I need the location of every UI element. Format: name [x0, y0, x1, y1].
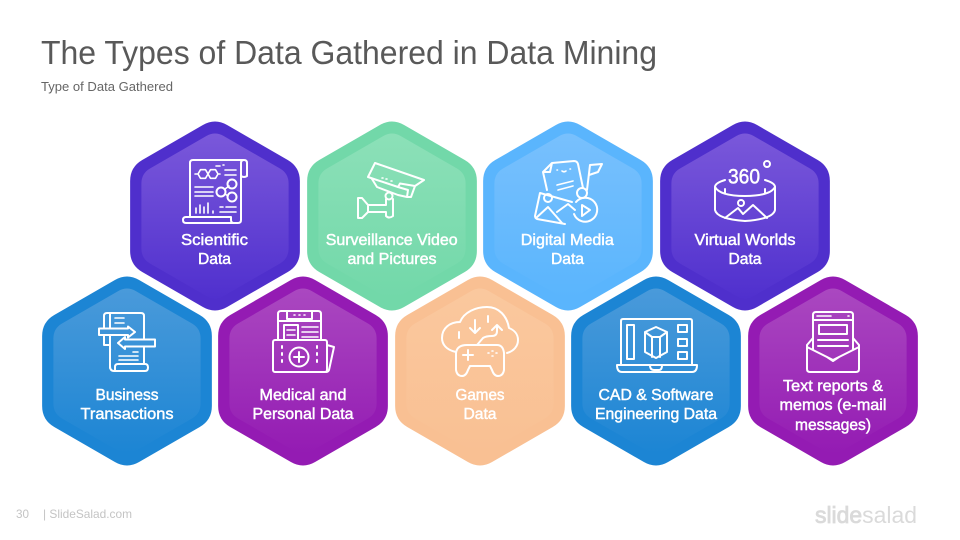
label	[780, 378, 886, 434]
panel: Medical and Personal Data	[218, 276, 388, 466]
label: Games	[456, 387, 504, 404]
page number: 30	[16, 507, 29, 521]
label: Digital Media	[521, 232, 614, 249]
icon: 360 virtual world: 360	[728, 166, 760, 188]
label: and Pictures	[348, 251, 436, 268]
footer source: | SlideSalad.com	[43, 507, 132, 521]
label: Transactions	[80, 406, 174, 423]
subtitle: Type of Data Gathered	[41, 80, 173, 94]
label: Data	[198, 251, 231, 268]
label	[694, 232, 796, 268]
panel: Games Data	[395, 276, 565, 466]
icon: 360 virtual world	[715, 161, 775, 221]
panel: Virtual Worlds Data	[660, 122, 830, 310]
label: memos (e-mail	[780, 397, 886, 414]
label: Business	[96, 387, 158, 404]
label: Data	[728, 251, 762, 268]
icon: medical folder	[273, 311, 334, 372]
label: Scientific	[181, 232, 248, 249]
icon: laptop with 3D model	[617, 319, 697, 372]
label	[326, 232, 458, 268]
label	[521, 232, 614, 268]
label: Medical and	[260, 387, 346, 404]
label: CAD & Software	[598, 387, 714, 404]
icon: email envelope	[807, 312, 859, 372]
label	[181, 232, 248, 268]
label	[456, 387, 504, 423]
icon: cloud gaming	[442, 307, 518, 376]
panel: Text reports & memos	[748, 276, 918, 466]
label	[80, 387, 174, 423]
label	[252, 387, 354, 423]
label: Text reports &	[783, 378, 883, 395]
label: Data	[551, 251, 584, 268]
label	[595, 387, 717, 423]
label: Engineering Data	[595, 406, 717, 423]
panel: CAD & Software Engineering Data	[571, 276, 741, 466]
panel: Scientific Data	[130, 122, 300, 310]
panel: Surveillance Video and Pictures	[307, 122, 477, 310]
label: Virtual Worlds	[694, 232, 796, 249]
panel: Digital Media Data	[483, 122, 653, 310]
label: Data	[464, 406, 497, 423]
icon: business document	[99, 313, 155, 371]
icon: digital media	[535, 161, 602, 224]
panel: Business Transactions	[42, 276, 212, 466]
icon: scientific paper	[183, 160, 247, 223]
label: Surveillance Video	[326, 232, 458, 249]
title: The Types of Data Gathered in Data Mining	[41, 34, 657, 71]
label: Personal Data	[252, 406, 354, 423]
icon: security camera	[358, 163, 424, 218]
label: messages)	[795, 417, 871, 434]
logo: slidesalad: slidesalad	[815, 502, 917, 528]
